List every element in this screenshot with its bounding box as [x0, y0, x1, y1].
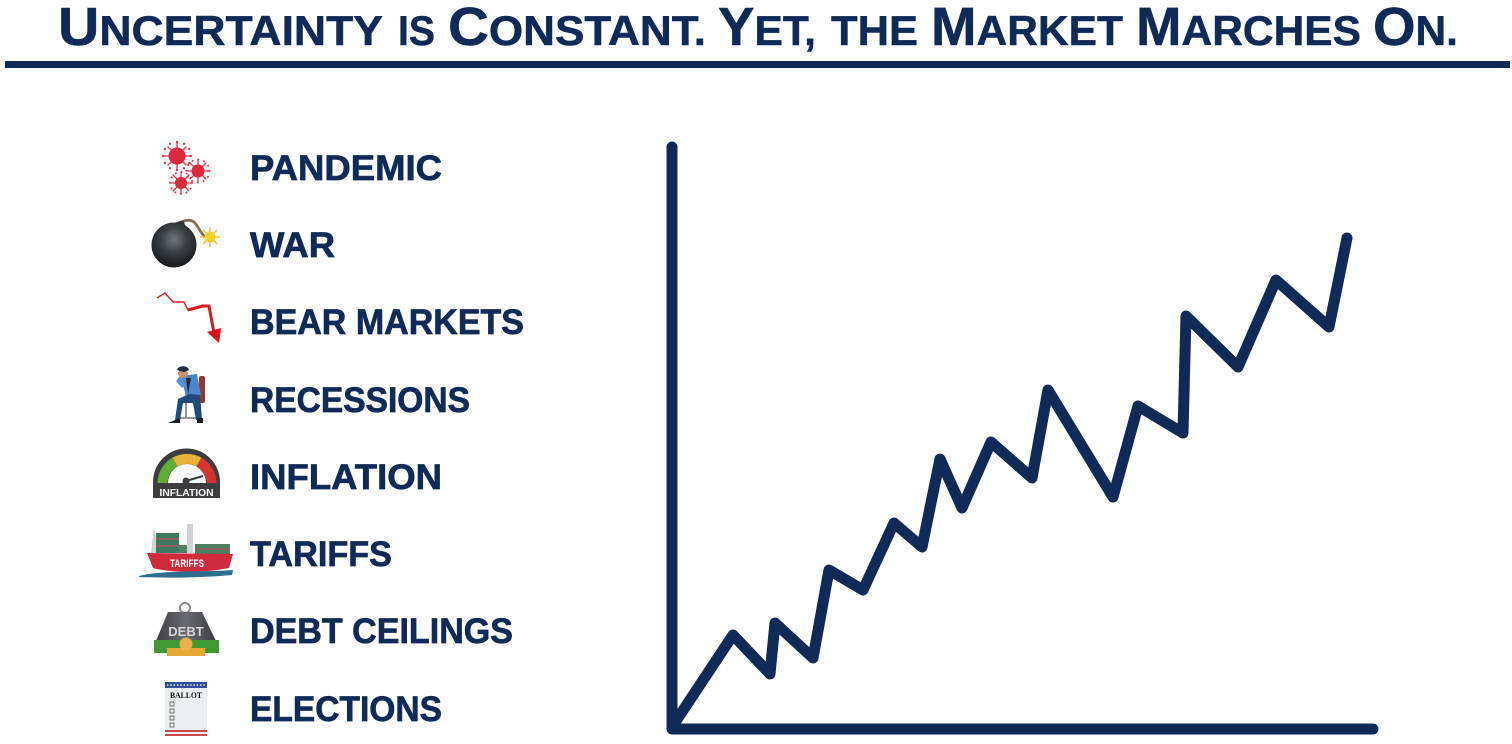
icon: debt weight [154, 603, 219, 656]
label: debt ceilings: DEBT CEILINGS [250, 612, 513, 651]
title [58, 0, 1458, 57]
icon: tariffs cargo ship [139, 524, 233, 578]
label: tariffs: TARIFFS [250, 535, 392, 574]
label: inflation: INFLATION [250, 458, 442, 497]
icon: inflation gauge [153, 448, 220, 499]
icon: tariffs cargo ship: TARIFFS [170, 558, 204, 570]
label: war: WAR [250, 226, 335, 265]
label: recessions: RECESSIONS [250, 381, 470, 420]
icon: bomb [152, 220, 220, 268]
icon: debt weight: DEBT [168, 624, 204, 639]
icon: ballot [165, 682, 207, 736]
line chart: rising market [672, 147, 1373, 729]
market line [672, 238, 1347, 727]
icon: stressed man on chair [168, 366, 205, 423]
label: bear markets: BEAR MARKETS [250, 303, 524, 342]
icon: ballot: BALLOT [170, 690, 202, 700]
list of uncertainties [139, 142, 524, 736]
chart axes [672, 147, 1373, 729]
title: IS [398, 7, 435, 54]
icon: falling red arrow [157, 293, 221, 343]
title: THE [831, 7, 918, 54]
icon: inflation gauge: INFLATION [160, 488, 214, 499]
label: pandemic: PANDEMIC [250, 149, 442, 188]
icon: virus [163, 142, 210, 194]
label: elections: ELECTIONS [250, 690, 442, 729]
